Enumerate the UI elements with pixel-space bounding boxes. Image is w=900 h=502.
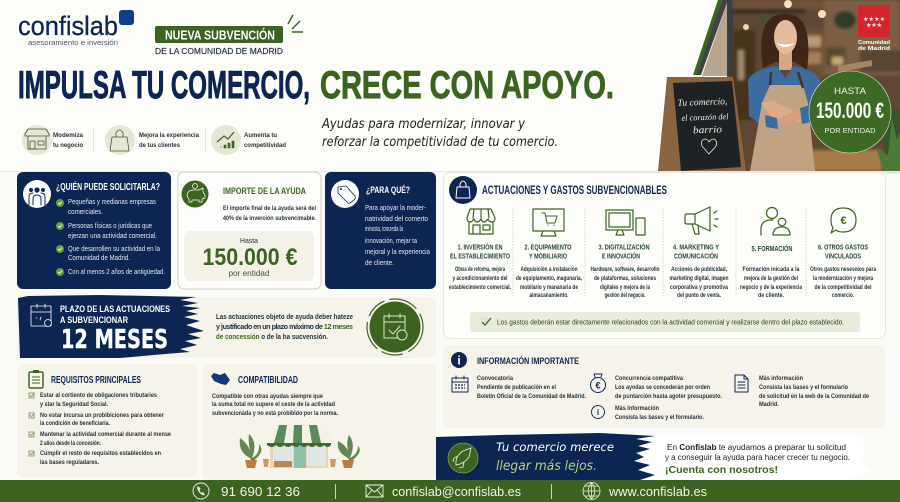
item: concurrencia: de puntarción hasta agoter presupuesto. [615, 393, 722, 400]
column 4: marketing: 4. MARKETING Y [673, 244, 719, 252]
panel: importe de la ayuda: El importe final de la ayuda será del [223, 205, 316, 212]
column 4: marketing: COMUNICACIÓN [674, 252, 718, 260]
footer: contact bar: www.confislab.es [608, 485, 707, 499]
panel: plazo 12 meses: Las actuaciones objeto de ayuda deber hateze [216, 312, 353, 321]
column 6: otros gastos: de la competitividad del [814, 284, 872, 291]
feature: customer experience: Mejora la experiencia [139, 132, 199, 139]
item: concurrencia: Concurrencia compatitiva [615, 375, 683, 382]
panel: quién puede solicitarla: Que desarrollen su actividad en la [68, 246, 160, 253]
panel: requisitos principales: No estar incursa un probibiciones para obtener [40, 412, 164, 419]
feature: competitiveness: Aumenta tu [244, 132, 277, 139]
panel: para qué: innovación, mejar ta [365, 238, 417, 245]
logo: Comunidad de Madrid: Comunidad [858, 40, 890, 46]
logo: Comunidad de Madrid: ★★★ [866, 22, 882, 29]
column 6: otros gastos: Otros gastos nesesnios para [810, 266, 876, 273]
column 4: marketing: corporativa y promotiva [670, 284, 728, 291]
panel: importe de la ayuda: Hasta [240, 236, 259, 245]
badge: nueva subvención [155, 15, 303, 56]
column 3: digitalización: 3. DIGITALIZACIÓN [598, 242, 650, 252]
panel: información importante: INFORMACIÓN IMPORTANTE [477, 355, 579, 367]
panel: plazo 12 meses: de concessión o de la ha sucvensión. [216, 332, 328, 341]
feature: modernize [22, 125, 83, 155]
panel: actuaciones y gastos [444, 172, 886, 338]
panel: requisitos principales: REQUISITOS PRINCIPALES [51, 375, 141, 386]
brush: navy banner [18, 295, 204, 358]
logo: Comunidad de Madrid: de Madrid [858, 46, 890, 52]
feature: competitiveness: competitividad [244, 142, 286, 149]
feature: modernize: tu negocio [53, 142, 83, 149]
column 5: formación: mejora de la gestión del [744, 275, 798, 282]
chalkboard: el corazón del [681, 111, 729, 123]
panel: plazo 12 meses: y justificado en un plazo máximo de 12 meses [216, 322, 353, 331]
column 5: formación: negocio y de la experiencia [740, 284, 802, 291]
column 4: marketing: del punto de venta. [677, 292, 721, 299]
chalkboard: barrio [693, 124, 722, 136]
icon: rocket [448, 443, 478, 473]
panel: quién puede solicitarla: ejerzan una actividad comercial. [68, 233, 157, 240]
panel: importe de la ayuda: 40% de la inverción subvencimable. [223, 215, 316, 222]
column 4: marketing [670, 207, 729, 299]
feature: competitiveness [211, 125, 286, 155]
panel: quién puede solicitarla: comerciales. [68, 209, 103, 216]
column 2: equipamiento: Y MOBILIARIO [529, 254, 567, 260]
icon: info: i [457, 354, 461, 368]
panel: requisitos principales: y star la Seguridad Social. [40, 401, 108, 408]
item: concurrencia: Los ayodas se concederán por orden [615, 384, 710, 391]
item: convocatoria [452, 375, 586, 400]
panel: quién puede solicitarla: Con al menos 2 años de antigüedad. [68, 269, 165, 276]
badge: nueva subvención: DE LA COMUNIDAD DE MADRID [155, 46, 283, 56]
column 1: establecimiento: establecimiento comercial. [449, 284, 511, 291]
panel: quién puede solicitarla [17, 172, 171, 289]
item: más información web [735, 375, 869, 408]
banner: tu comercio merece: En Confislab te ayudamos a preparar tu solicitud [667, 442, 846, 452]
note: gastos relacionados [470, 312, 860, 332]
icon: clipboard [29, 370, 43, 388]
icon: phone [193, 483, 209, 499]
column 6: otros gastos: comercio. [832, 292, 854, 299]
panel: compatibilidad [202, 364, 436, 480]
panel: requisitos principales: Cumplir el resto de requisitos establecidos en [40, 450, 161, 457]
feature: customer experience: de tus clientes [139, 142, 180, 149]
column 5: formación [740, 208, 802, 299]
panel: requisitos principales: Mantenar la actividad comercial durante al mense [40, 431, 171, 438]
icon: info [451, 352, 467, 368]
panel: para qué: minosta, tomzeda la [365, 226, 403, 233]
column 2: equipamiento: 2. EQUIPAMENTO [524, 244, 572, 252]
icon: piggy bank [182, 180, 208, 208]
item: más información web: Consista las bases y el formulario [759, 384, 848, 391]
panel: compatibilidad: la suma total no supere el ceste de la actividad [212, 401, 335, 408]
icon: globe [583, 482, 600, 500]
panel: plazo 12 meses: 12 MESES [61, 325, 168, 355]
panel: plazo 12 meses: A SUBVENCIONAR [60, 315, 128, 326]
banner: tu comercio merece: ¡Cuenta con nosotros! [665, 465, 778, 476]
feature: modernize: Modemiza [53, 132, 83, 139]
column 3: digitalización [590, 210, 660, 299]
item: convocatoria: Convocatoria [477, 375, 513, 382]
icon: calendar seal [367, 299, 423, 355]
logo: Comunidad de Madrid: ★★★★ [863, 16, 885, 23]
panel: quién puede solicitarla: Comunidad de Madrid. [68, 255, 130, 262]
column 5: formación: Formación inicada a la [742, 266, 800, 273]
footer: contact bar [0, 480, 900, 502]
column 1: establecimiento [449, 209, 511, 291]
column 6: otros gastos: € [840, 215, 847, 227]
panel: requisitos principales [17, 364, 198, 478]
logo: Comunidad de Madrid [858, 5, 890, 52]
panel: compatibilidad: Compatible con otras ayudas siempre que [212, 393, 323, 400]
subtitle [321, 117, 558, 150]
panel: requisitos principales: la condición de beneficiaría. [40, 420, 110, 427]
column 1: establecimiento: 1. INVERSIÓN EN [458, 242, 502, 252]
banner: tu comercio merece: llegar más lejos. [496, 459, 597, 474]
feature: customer experience [105, 125, 199, 155]
column 2: equipamiento: de equipiamento, magunaria, [516, 275, 582, 282]
subtitle: reforzar la competitividad de tu comercio. [322, 135, 558, 150]
icon: people [23, 180, 51, 208]
column 5: formación: de cliente. [758, 292, 784, 299]
brush: white [640, 435, 872, 480]
column 4: marketing: marketing digital, imagen [670, 275, 729, 282]
item: más información web: Madrid. [759, 401, 779, 408]
photo: woman [748, 14, 821, 171]
illustration: green storefront [240, 425, 360, 468]
item: concurrencia: € [595, 380, 601, 390]
plant right [338, 435, 360, 462]
panel: para qué: natrividad del comerto [365, 216, 428, 223]
panel: quién puede solicitarla: Personas físicas o jurídicas que [68, 223, 152, 230]
plant left [240, 434, 261, 462]
panel: requisitos principales: 2 alios desde la concesión. [40, 440, 101, 447]
panel: para qué: ¿PARA QUÉ? [366, 185, 410, 196]
column 3: digitalización: Hardware, software, desarrollo [590, 266, 660, 273]
badge: hasta 150.000 € [809, 71, 891, 153]
column 2: equipamiento: Adquisición a instalación [520, 266, 578, 273]
logo: confislab: asesoramiento e inversión [28, 40, 118, 47]
panel: para qué: de cliente. [365, 260, 394, 267]
item: más información web: Más información [759, 375, 803, 382]
panel: para qué [325, 172, 436, 289]
logo: confislab: confislab [18, 11, 118, 41]
icon: mail [366, 485, 383, 497]
column 6: otros gastos: 6. OTROS GASTOS [818, 244, 868, 252]
panel: importe de la ayuda: IMPORTE DE LA AYUDA [223, 186, 306, 197]
title: CRECE CON APOYO. [320, 64, 614, 107]
banner: tu comercio merece [436, 433, 872, 480]
column 6: otros gastos: VINCULADOS [825, 254, 861, 260]
column 5: formación: 5. FORMACIÓN [752, 244, 792, 253]
banner: tu comercio merece: Tu comercio merece [496, 440, 614, 454]
footer: contact bar: 91 690 12 36 [221, 485, 300, 499]
item: más información: Consista las bases y el formulario. [615, 414, 704, 421]
chalkboard: Tu comercio, [677, 97, 728, 109]
badge: nueva subvención: NUEVA SUBVENCIÓN [165, 28, 275, 42]
column 3: digitalización: de plataformas, soluciones [594, 275, 656, 282]
panel: importe de la ayuda: 150.000 € [202, 244, 298, 271]
icon: calendar [31, 304, 52, 326]
icon: price tag [331, 180, 359, 208]
column 1: establecimiento: EL ESTABLECIMIENTO [450, 254, 510, 260]
panel: requisitos principales: las bases reguladares. [40, 459, 99, 466]
column 2: equipamiento: almacanamiento. [530, 292, 569, 299]
column 6: otros gastos: la modernización y mejora [813, 275, 873, 282]
panel: compatibilidad: COMPATIBILIDAD [238, 375, 298, 386]
banner: tu comercio merece: y a conseguir la ayuda para hacer crecer tu negocio. [665, 452, 850, 462]
item: más información: i [597, 408, 599, 417]
column 3: digitalización: E INNOVACIÓN [602, 252, 640, 260]
column 1: establecimiento: y acondicionamiento del [452, 275, 508, 282]
item: más información [592, 405, 704, 421]
item: convocatoria: Pendiente de publicación en el [477, 384, 556, 391]
column 6: otros gastos [810, 208, 876, 299]
column 2: equipamiento [516, 209, 582, 299]
column 3: digitalización: digitales y mejora de la [600, 284, 650, 291]
panel: compatibilidad: subvencionada y no está probibido por la norma. [212, 410, 338, 417]
panel: para qué: mejoral y la experiencia [365, 249, 430, 256]
note: gastos relacionados: Los gastos deberán estar directamente relacionados con la actividad comercial y realizarse dentro del plazo establecido. [497, 318, 844, 326]
panel: plazo 12 meses [17, 295, 436, 358]
title: IMPULSA TU COMERCIO, [18, 64, 310, 107]
badge: hasta 150.000 €: POR ENTIDAD [824, 126, 876, 135]
icon: shopping bag [449, 176, 477, 204]
footer: contact bar: confislab@confislab.es [392, 485, 521, 499]
panel: para qué: Para apoyar la moder- [365, 205, 427, 212]
subtitle: Ayudas para modernizar, innovar y [321, 117, 525, 132]
brush: navy [436, 433, 655, 480]
panel: importe de la ayuda: por entidad [228, 269, 270, 278]
icon: handshake [211, 373, 230, 385]
column 1: establecimiento: Obras de reforma, mejora [455, 266, 505, 273]
photo: shop background [693, 0, 900, 171]
panel: requisitos principales: Estar al cortiento de obligaciones tributaries [40, 392, 157, 399]
panel: información importante [443, 345, 885, 428]
column 2: equipamiento: mobilario y mananaria de [520, 284, 578, 291]
chalkboard [658, 77, 746, 171]
panel: quién puede solicitarla: ¿QUIÉN PUEDE SOLICITARLA? [56, 180, 160, 193]
panel: importe de la ayuda [178, 172, 321, 289]
panel: actuaciones y gastos: ACTUACIONES Y GASTOS SUBVENCIONABLES [482, 185, 667, 197]
item: más información: Más Información [615, 405, 659, 412]
item: concurrencia [590, 374, 722, 400]
badge: hasta 150.000 €: HASTA [834, 86, 867, 97]
panel: quién puede solicitarla: Pequeñas y medianas empresas [68, 199, 156, 206]
item: convocatoria: Boletín Oficial de la Comunidad de Madrid. [477, 393, 586, 400]
column 3: digitalización: gestión del negocio. [604, 292, 646, 299]
panel: plazo 12 meses: PLAZO DE LAS ACTUACIONES [60, 304, 170, 315]
column 4: marketing: Acciones de publicidad, [671, 266, 727, 273]
item: más información web: de solicitud en la web de la Comunidad de [759, 393, 869, 400]
